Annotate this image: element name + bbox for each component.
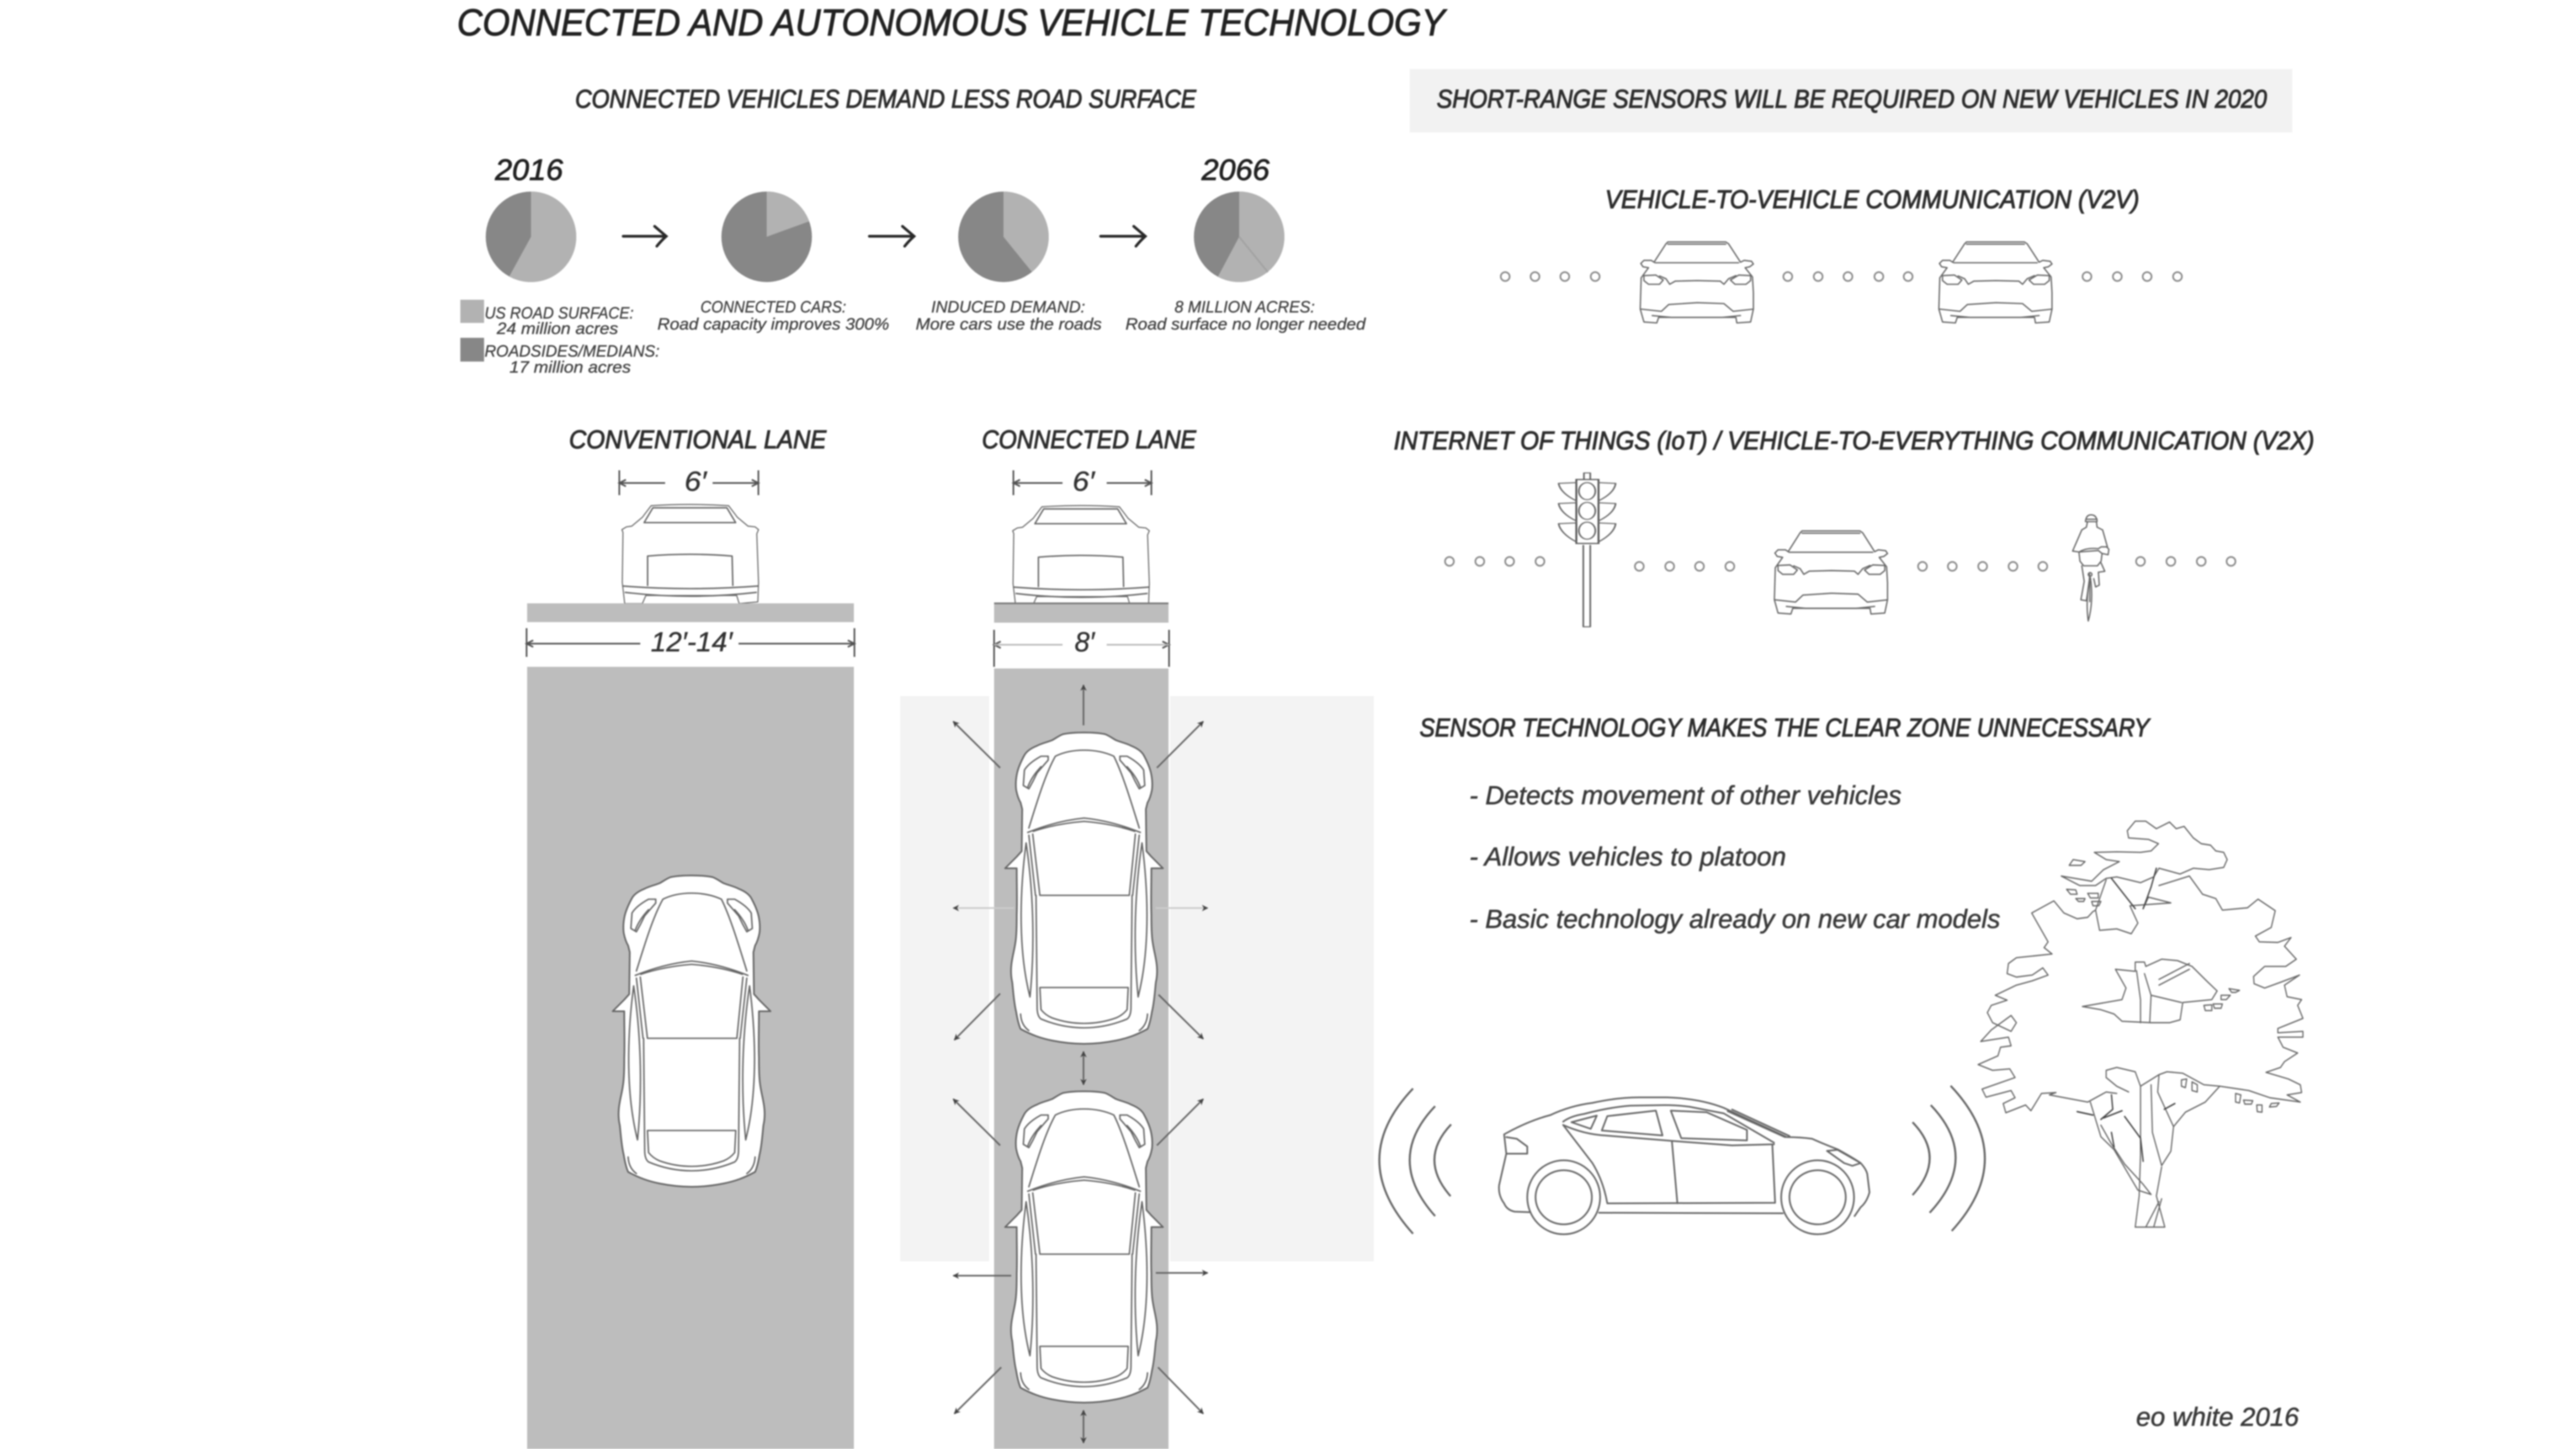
caption: connected cars [657,298,889,333]
panel: road surface demand [460,84,1366,376]
arrow [1101,226,1145,246]
pie chart: 2016 [486,192,576,282]
sensor arrows: car 1 [953,685,1208,1085]
icon: car rear view [1013,506,1149,604]
icon: tree [1978,821,2303,1227]
icon: connected car 1 [1005,733,1163,1044]
banner: short-range sensors: SHORT-RANGE SENSORS WILL BE REQUIRED ON NEW VEHICLES IN 2020 [1437,84,2267,113]
dimension: lane width 8 ft [994,627,1169,667]
icon: sensor waves right [1913,1086,1985,1231]
bullet list [1469,781,2000,933]
signal dots: left [1501,272,1600,281]
panel: conventional lane [527,425,854,1449]
legend text: road surface: US ROAD SURFACE: [485,304,634,322]
icon: car front [1775,531,1888,614]
title: CONNECTED AND AUTONOMOUS VEHICLE TECHNOLOGY [457,2,1447,44]
heading: sensor technology: SENSOR TECHNOLOGY MAKES THE CLEAR ZONE UNNECESSARY [1420,713,2151,742]
credit: eo white 2016 [2136,1402,2299,1431]
icon: cyclist [2073,515,2109,621]
legend text: roadsides: ROADSIDES/MEDIANS: [485,342,660,360]
panel: IoT / V2X communication [1394,426,2314,627]
panel: sensor technology [1379,713,2303,1234]
dimension: car width 6 ft: 6′ [684,466,708,497]
signal dots: centre left [1635,562,1734,571]
pie chart: 2066 [1194,192,1284,282]
caption: connected cars: CONNECTED CARS: [700,298,846,316]
caption: induced demand: INDUCED DEMAND: [931,298,1085,316]
signal dots: middle [1783,272,1913,281]
legend swatch: roadsides [460,338,484,362]
heading: road surface: CONNECTED VEHICLES DEMAND LESS ROAD SURFACE [575,84,1197,113]
dimension: car width 6 ft [619,466,758,497]
panel: connected lane [900,425,1374,1449]
heading: V2V: VEHICLE-TO-VEHICLE COMMUNICATION (V2V) [1605,185,2139,214]
caption: induced demand: More cars use the roads [916,315,1102,333]
arrow [869,226,914,246]
icon: car front 1 [1640,242,1754,323]
caption: 8 million acres [1125,298,1366,333]
road: connected lane [994,668,1169,1449]
road: conventional lane [527,667,854,1449]
bullet list: - Detects movement of other vehicles [1469,781,1902,810]
heading: IoT V2X: INTERNET OF THINGS (IoT) / VEHICLE-TO-EVERYTHING COMMUNICATION (V2X) [1394,426,2314,455]
legend swatch: road surface [460,300,484,323]
label: 2066: 2066 [1201,153,1270,187]
icon: traffic light [1559,473,1616,627]
heading: conventional lane: CONVENTIONAL LANE [569,425,827,454]
banner: short-range sensors [1410,69,2292,132]
dimension: car width 6 ft: 6′ [1072,466,1096,497]
dimension: lane width 8 ft: 8′ [1075,627,1096,657]
sensor arrows: car 2 [953,1099,1208,1443]
icon: car rear view [622,505,758,603]
caption: 8 million acres: 8 MILLION ACRES: [1175,298,1315,316]
dimension: lane width 12-14 ft: 12′-14′ [651,627,734,657]
heading: connected lane: CONNECTED LANE [982,425,1197,454]
dimension: lane width 12-14 ft [527,627,854,657]
icon: connected car 2 [1005,1091,1163,1403]
caption: induced demand [916,298,1102,333]
icon: car top view [613,875,771,1187]
clear zone panel [900,696,1374,1261]
signal dots: centre right [1918,562,2047,571]
signal dots: far left [1445,557,1544,566]
icon: sensor waves left [1379,1089,1451,1234]
pie chart: connected cars [721,192,812,282]
caption: connected cars: Road capacity improves 300% [657,315,889,333]
legend value: road surface: 24 million acres [496,320,618,338]
legend [460,300,660,376]
icon: side view car [1499,1097,1869,1234]
road section strip [994,603,1169,623]
bullet list: - Basic technology already on new car models [1469,904,2000,933]
arrow [623,226,666,246]
bullet list: - Allows vehicles to platoon [1469,842,1786,871]
legend value: roadsides: 17 million acres [509,358,631,376]
pie chart: induced demand [958,192,1049,282]
dimension: car width 6 ft [1013,466,1151,497]
icon: car front 2 [1939,242,2052,323]
signal dots: far right [2136,557,2235,566]
label: 2016: 2016 [495,153,564,187]
caption: 8 million acres: Road surface no longer needed [1125,315,1366,333]
panel: V2V communication [1501,185,2182,323]
signal dots: right [2083,272,2182,281]
road section strip [527,603,854,622]
